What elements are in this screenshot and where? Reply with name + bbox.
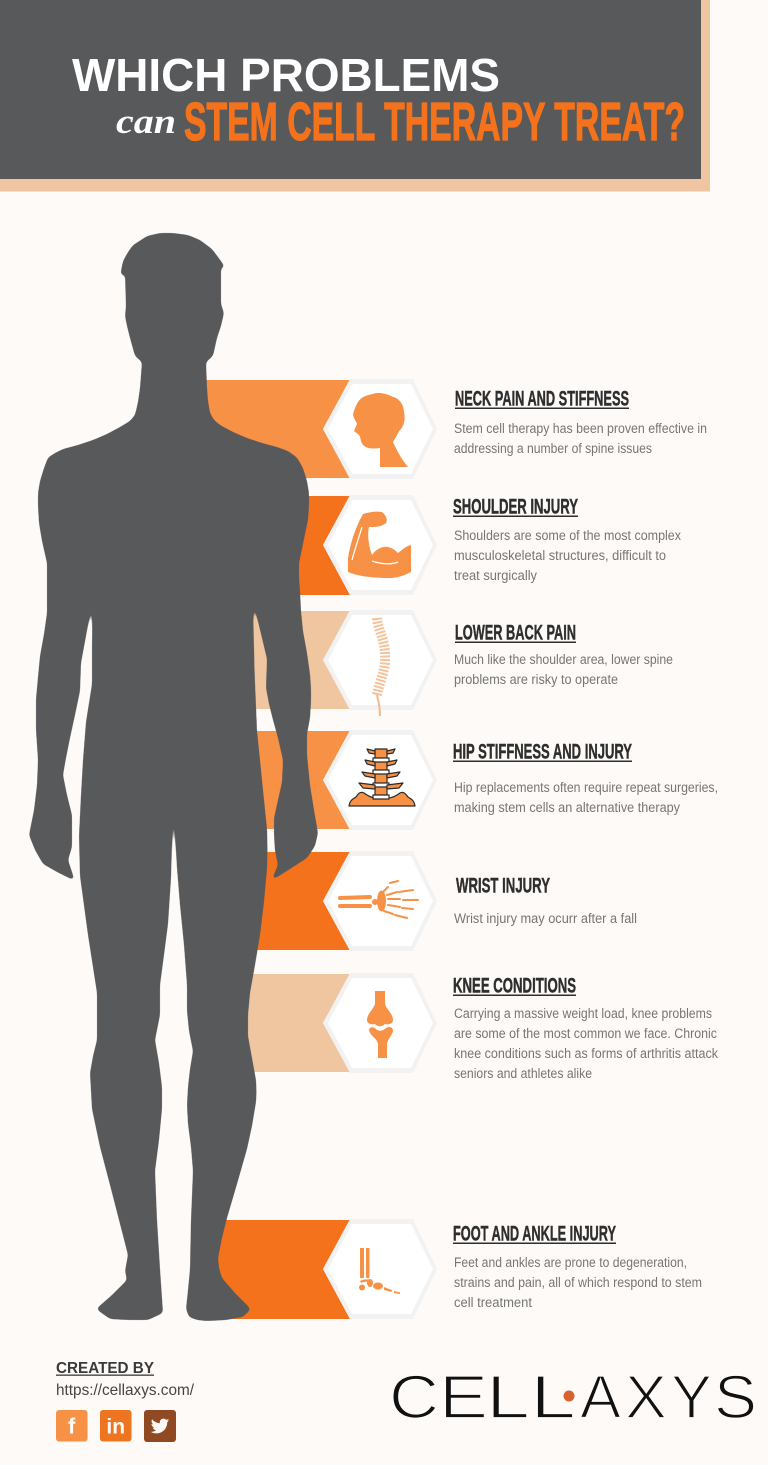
panel: lower back text: LOWER BACK PAIN xyxy=(455,622,576,644)
panel: wrist band xyxy=(254,851,437,951)
panel: shoulder text: SHOULDER INJURY xyxy=(453,496,578,518)
icon: knee joint xyxy=(367,991,393,1058)
panel: knee band xyxy=(245,973,437,1073)
panel: foot text xyxy=(453,1222,702,1310)
panel: lower back text: problems are risky to operate xyxy=(454,672,618,687)
panel: wrist text xyxy=(454,874,637,926)
panel: neck pain band xyxy=(200,379,437,479)
icon: wrist bones xyxy=(340,881,418,918)
panel: knee text: seniors and athletes alike xyxy=(454,1066,592,1081)
header banner xyxy=(0,0,710,192)
logo: Cellaxys: C xyxy=(389,1363,439,1431)
icon: linkedin xyxy=(100,1410,132,1442)
icon: linkedin: in xyxy=(106,1416,125,1438)
panel: knee text: are some of the most common we face. Chronic xyxy=(454,1026,717,1041)
panel: hip text xyxy=(453,740,718,815)
panel: shoulder text xyxy=(453,496,681,583)
human body silhouette xyxy=(29,233,318,1321)
logo: Cellaxys xyxy=(389,1363,757,1431)
logo: Cellaxys: S xyxy=(714,1363,757,1431)
icon: facebook: f xyxy=(68,1414,76,1438)
panel: foot text: Feet and ankles are prone to degeneration, xyxy=(454,1255,687,1270)
panel: foot band xyxy=(215,1219,437,1319)
panel: hip text: Hip replacements often require repeat surgeries, xyxy=(454,780,718,795)
icon: lumbar vertebrae xyxy=(349,749,415,806)
title xyxy=(72,49,685,152)
logo: Cellaxys: X xyxy=(625,1363,667,1431)
icon: spine xyxy=(377,618,385,716)
icon: head profile xyxy=(353,393,408,467)
panel: knee text: knee conditions such as forms of arthritis attack xyxy=(454,1046,718,1061)
panel: wrist text: Wrist injury may ocurr after a fall xyxy=(454,911,637,926)
panel: lower back text xyxy=(454,622,673,687)
panel: foot text: strains and pain, all of which respond to stem xyxy=(454,1275,702,1290)
panel: neck pain text: NECK PAIN AND STIFFNESS xyxy=(455,388,629,410)
icon: twitter xyxy=(144,1410,176,1442)
logo: Cellaxys: E xyxy=(439,1363,488,1431)
footer credit: https://cellaxys.com/ xyxy=(56,1382,195,1399)
panel: hip band xyxy=(254,730,437,830)
panel: lower back band xyxy=(254,610,437,716)
panel: knee text: KNEE CONDITIONS xyxy=(453,974,576,998)
panel: foot text: FOOT AND ANKLE INJURY xyxy=(453,1222,616,1246)
panel: shoulder band xyxy=(290,495,437,595)
title: can xyxy=(116,102,176,141)
panel: lower back text: Much like the shoulder area, lower spine xyxy=(454,652,673,667)
title: WHICH PROBLEMS xyxy=(72,49,500,101)
footer credit: CREATED BY xyxy=(56,1360,154,1377)
logo: Cellaxys: L xyxy=(530,1363,576,1431)
logo dot xyxy=(564,1390,574,1402)
panel: knee text: Carrying a massive weight load, knee problems xyxy=(454,1006,712,1021)
footer credit xyxy=(56,1360,195,1399)
logo: Cellaxys: Y xyxy=(671,1363,712,1431)
panel: wrist text: WRIST INJURY xyxy=(456,874,550,898)
panel: neck pain text: Stem cell therapy has been proven effective in xyxy=(454,421,707,436)
panel: neck pain text: addressing a number of spine issues xyxy=(454,441,652,456)
logo: Cellaxys: L xyxy=(486,1363,530,1431)
panel: knee text xyxy=(453,974,718,1081)
panel: shoulder text: Shoulders are some of the most complex xyxy=(454,528,681,543)
panel: hip text: HIP STIFFNESS AND INJURY xyxy=(453,740,632,764)
panel: shoulder text: treat surgically xyxy=(454,568,537,583)
panel: foot text: cell treatment xyxy=(454,1295,532,1310)
panel: hip text: making stem cells an alternative therapy xyxy=(454,800,680,815)
panel: neck pain text xyxy=(454,388,707,456)
panel: shoulder text: musculoskeletal structures, difficult to xyxy=(454,548,666,563)
icon: foot bones xyxy=(359,1248,400,1294)
icon: facebook xyxy=(56,1410,88,1442)
icon: flexed arm xyxy=(348,512,411,578)
logo: Cellaxys: A xyxy=(580,1363,621,1431)
